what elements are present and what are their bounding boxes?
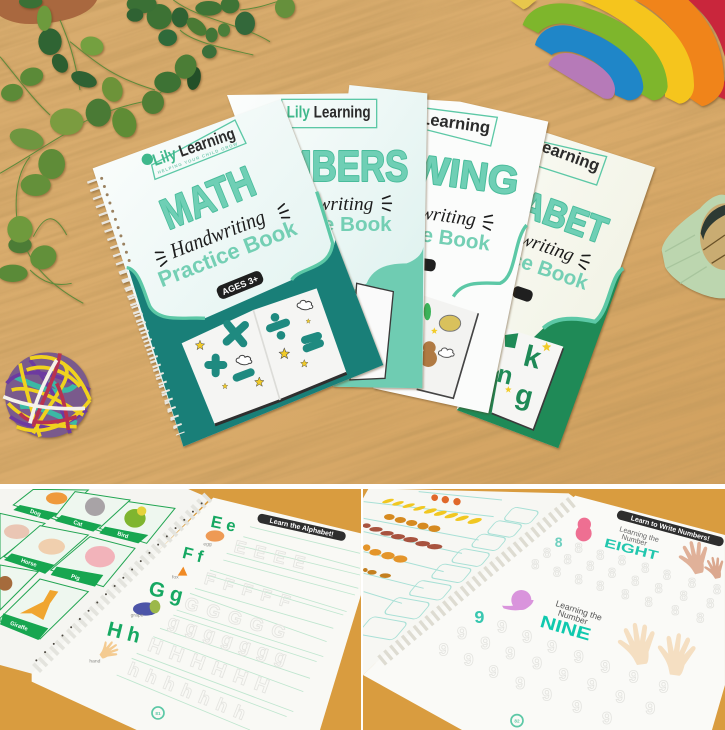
faint traced eights: 8: [688, 574, 696, 590]
card: horse: Horse: [20, 558, 37, 569]
faint traced nines: 9: [587, 675, 597, 695]
section: number eight: Learning the: [619, 524, 660, 544]
card: bird: [99, 502, 175, 543]
faint traced eights: 8: [641, 559, 649, 575]
faint traced eights: 8: [631, 573, 639, 589]
math cover: [93, 99, 383, 447]
letter headings: [105, 512, 238, 648]
card: monkey: [0, 565, 38, 610]
faint traced nines: 9: [602, 708, 612, 728]
books fanned: back three covers: [227, 85, 655, 448]
picture words: hand: [89, 658, 101, 664]
drawing title: DRAWING: [327, 135, 521, 204]
letter headings: E e: [209, 512, 238, 536]
math coil over teal: [123, 272, 181, 434]
panel: alphabet tracing spread: [0, 488, 361, 730]
faint traced nines: 9: [629, 666, 639, 686]
alphabet open book: n: [494, 360, 516, 391]
numbers subtitle: Handwriting: [274, 194, 374, 215]
math spiral binding: [92, 180, 181, 434]
math logo: HELPING YOUR CHILD GROW: [157, 141, 239, 175]
numbers open book: [350, 283, 393, 380]
section: number nine: NINE: [538, 611, 593, 645]
wooden table: [0, 0, 725, 484]
numbers cover: [227, 85, 427, 388]
faint traced nines: 9: [572, 696, 582, 716]
wood background: [363, 489, 725, 730]
card: dog: Dog: [29, 509, 42, 518]
faint traced eights: 8: [655, 580, 663, 596]
page number: [511, 715, 523, 727]
faint traced nines: 9: [522, 626, 532, 646]
numbers teal wave: [333, 247, 424, 388]
faint traced eights: 8: [596, 547, 604, 563]
faint traced nines: 9: [645, 698, 655, 718]
picture words: grape: [131, 613, 144, 619]
book: drawing: [373, 100, 550, 415]
faint traced nines: 9: [489, 661, 499, 681]
numbers title: NUMBERS: [232, 143, 408, 191]
section: number nine: Number: [557, 608, 589, 627]
alphabet open book: g: [512, 378, 536, 414]
faint traced eights: [531, 539, 721, 625]
drawing logo: Lily Learning: [386, 104, 491, 137]
faint traced nines: 9: [497, 616, 507, 636]
card: pig: Pig: [70, 574, 81, 582]
card: giraffe: [0, 579, 88, 640]
fruit rows: [382, 498, 482, 525]
numbers practice book: Practice Book: [254, 213, 392, 236]
alphabet subtitle: Handwriting: [476, 214, 577, 266]
traced letters: [125, 536, 316, 727]
math symbols: [208, 323, 320, 378]
faint traced eights: 8: [696, 609, 704, 625]
book: numbers: [227, 85, 427, 388]
faint traced nines: [439, 616, 669, 728]
faint traced eights: 8: [663, 567, 671, 583]
faint traced nines: 9: [457, 623, 467, 643]
card: cat: [55, 492, 130, 532]
faint traced eights: 8: [575, 539, 583, 555]
picture words: [89, 530, 224, 664]
alphabet logo: Lily Learning: [499, 122, 602, 175]
drawing subtitle: [425, 208, 494, 231]
alphabet title: ALPHABET: [433, 153, 613, 252]
numbers subtitle: [322, 195, 392, 214]
faint traced eights: 8: [706, 595, 714, 611]
math teal wave: [127, 192, 383, 447]
faint traced nines: 9: [505, 643, 515, 663]
rainbow wooden toy: [510, 0, 725, 106]
traced letters: GGGGG: [182, 593, 296, 645]
math logo: Lily Learning: [150, 124, 238, 170]
faint traced eights: 8: [543, 544, 551, 560]
page number: [152, 707, 164, 719]
page number: 81: [155, 711, 161, 716]
math subtitle: Handwriting: [166, 205, 269, 263]
section: number eight: Number: [621, 532, 649, 548]
letter headings: H h: [105, 618, 143, 648]
wood background: [0, 489, 361, 730]
faint traced nines: 9: [600, 656, 610, 676]
traced letters: EEEE: [232, 536, 316, 575]
spiral binding: [33, 497, 208, 672]
pill: Learn the Alphabet: Learn the Alphabet!: [269, 518, 334, 539]
faint traced eights: 8: [645, 593, 653, 609]
math ages badge: [215, 270, 265, 300]
card: pig: [51, 537, 135, 587]
faint traced eights: 8: [575, 571, 583, 587]
section: number eight: 8: [555, 534, 563, 550]
math binding holes: [102, 178, 131, 265]
faint traced eights: 8: [531, 556, 539, 572]
rubber band ball: [3, 352, 90, 438]
faint traced eights: 8: [713, 581, 721, 597]
faint traced nines: 9: [542, 685, 552, 705]
book: math: [92, 99, 383, 447]
section: number nine: Learning the: [554, 598, 604, 623]
faint traced eights: 8: [564, 551, 572, 567]
faint traced nines: 9: [532, 653, 542, 673]
drawing subtitle: Handwriting: [375, 196, 478, 231]
drawing ages badge: [424, 258, 436, 272]
faint traced eights: 8: [671, 602, 679, 618]
section: number eight: EIGHT: [603, 536, 660, 563]
faint traced nines: 9: [439, 640, 449, 660]
alphabet open book: k: [520, 340, 545, 376]
section: number nine: 9: [474, 607, 484, 627]
faint traced nines: 9: [547, 636, 557, 656]
book: alphabet: [456, 132, 656, 450]
trailing green plant: [0, 0, 295, 303]
right numbers page: [363, 496, 725, 730]
math ages badge: AGES 3+: [221, 273, 260, 297]
faint traced nines: 9: [559, 665, 569, 685]
section: number eight: [555, 518, 725, 581]
left page with animal cards: [0, 488, 210, 675]
letter headings: G g: [146, 577, 185, 608]
faint traced eights: 8: [680, 588, 688, 604]
math title: MATH: [154, 158, 262, 239]
alphabet ages badge: [512, 286, 533, 302]
traced letters: FFFFF: [202, 569, 301, 614]
traced letters: ggggggg: [165, 610, 297, 671]
card: bird: Bird: [116, 531, 129, 540]
traced letters: HHHHHH: [145, 635, 280, 701]
drawing open book: [416, 296, 480, 400]
faint traced nines: 9: [515, 673, 525, 693]
card: cat: Cat: [72, 520, 83, 528]
picture words: egg: [203, 542, 212, 548]
faint traced nines: 9: [659, 676, 669, 696]
pill: Learn the Alphabet: [257, 513, 347, 542]
alphabet cover: [457, 120, 655, 448]
panel: hero photo of four books on wooden desk: [0, 0, 725, 484]
drawing green wave: [453, 225, 527, 297]
drawing logo: [426, 108, 498, 147]
alphabet subtitle: [523, 238, 591, 270]
faint traced nines: 9: [615, 686, 625, 706]
answer boxes: [357, 492, 540, 640]
drawing cover: [373, 98, 548, 413]
numbers logo: [282, 99, 377, 128]
page number: 82: [514, 719, 520, 724]
letter headings: F f: [181, 543, 205, 567]
picture words: fox: [172, 574, 179, 580]
panel: number tracing spread: [357, 488, 725, 730]
card: horse: [4, 526, 88, 573]
faint traced nines: 9: [480, 633, 490, 653]
card: dog: [13, 489, 88, 520]
right alphabet page: [32, 497, 361, 730]
plant pot: [0, 0, 97, 24]
drawing practice book: Practice Book: [352, 214, 492, 256]
left counting page: [357, 488, 575, 675]
numbers logo: Lily Learning: [287, 102, 371, 121]
pill: Learn to Write Numbers: [616, 510, 725, 547]
faint traced eights: 8: [618, 552, 626, 568]
faint traced eights: 8: [621, 586, 629, 602]
mint fluted cup: [662, 195, 725, 298]
math open book illustration: [182, 288, 347, 425]
card: cow: [0, 513, 45, 559]
pill: Learn to Write Numbers: Learn to Write Numbers!: [630, 515, 710, 543]
faint traced eights: 8: [608, 564, 616, 580]
faint traced nines: 9: [574, 646, 584, 666]
faint traced nines: 9: [464, 650, 474, 670]
card: giraffe: Giraffe: [9, 621, 28, 633]
traced letters: hhhhhhh: [125, 658, 256, 727]
tracing lines: [117, 527, 360, 730]
section: number nine: [474, 590, 697, 678]
faint traced eights: 8: [553, 563, 561, 579]
alphabet green wave: [457, 268, 623, 448]
faint traced eights: 8: [596, 578, 604, 594]
alphabet open book: [492, 328, 563, 430]
spiral binding: [380, 502, 572, 662]
alphabet practice book: Practice Book: [453, 228, 591, 295]
math practice book: Practice Book: [154, 215, 301, 292]
alphabet logo: [539, 142, 608, 186]
faint traced eights: 8: [586, 558, 594, 574]
